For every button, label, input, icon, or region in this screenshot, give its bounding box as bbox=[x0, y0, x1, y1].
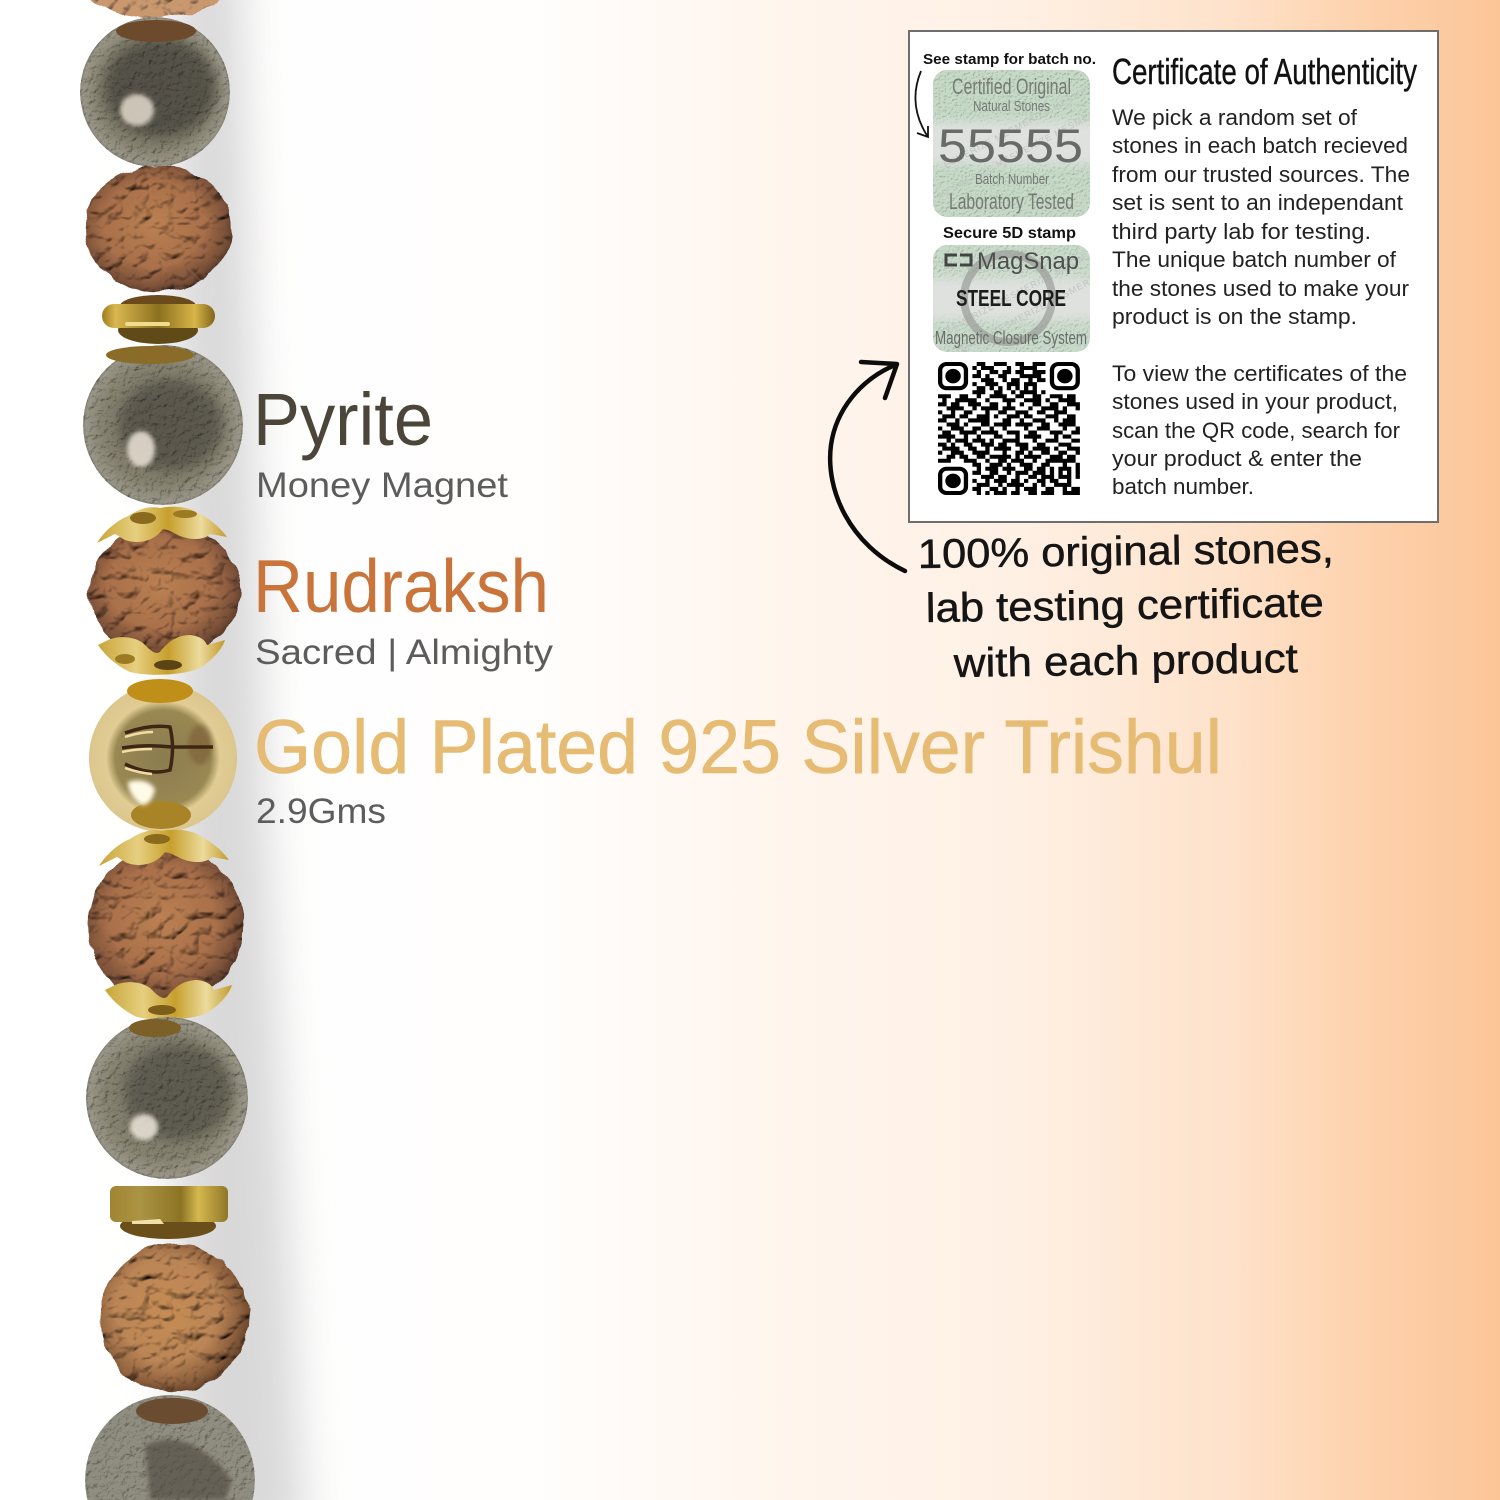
bead: rudraksh 2 with gold caps bbox=[89, 507, 241, 675]
stamp: magsnap steel core: MagSnap bbox=[977, 248, 1079, 275]
text block: how to view certificates: scan the QR code, search for bbox=[1112, 418, 1400, 443]
text block: how to view certificates: your product & enter the bbox=[1112, 446, 1362, 471]
stamp: certified original: Batch Number bbox=[975, 171, 1049, 188]
heading: Rudraksh: Rudraksh bbox=[253, 544, 549, 628]
text block: batch testing: set is sent to an independant bbox=[1112, 190, 1403, 215]
bracelet beads bbox=[80, 0, 255, 1500]
stamp: magsnap steel core: ESMERIZE MESMERIZE MESMERIZE bbox=[938, 269, 1107, 365]
soft bead shadow bbox=[175, 0, 305, 1500]
text block: batch testing: The unique batch number of bbox=[1112, 247, 1397, 272]
subheading: Money Magnet: Money Magnet bbox=[256, 466, 508, 505]
stamp: certified original bbox=[933, 70, 1090, 217]
callout: original stones: 100% original stones, bbox=[917, 525, 1334, 577]
text block: batch testing: the stones used to make your bbox=[1112, 276, 1409, 301]
bead: gold trishul bbox=[89, 679, 237, 832]
icon: trishul engraving bbox=[122, 726, 213, 774]
label: rudraksh bbox=[253, 544, 554, 672]
stamp caption: secure 5D: Secure 5D stamp bbox=[943, 225, 1076, 242]
stamp: magsnap steel core: STEEL CORE bbox=[956, 285, 1066, 311]
callout: original stones bbox=[917, 525, 1334, 686]
text block: batch testing: product is on the stamp. bbox=[1112, 304, 1357, 329]
stamp: certified original: Laboratory Tested bbox=[949, 189, 1074, 214]
label: pyrite bbox=[253, 378, 508, 505]
stamp: certified original: Natural Stones bbox=[973, 98, 1050, 115]
text block: batch testing bbox=[1112, 105, 1410, 329]
text block: batch testing: from our trusted sources. The bbox=[1112, 162, 1410, 187]
QR code bbox=[938, 362, 1080, 495]
bead: rudraksh 4 bbox=[100, 1243, 248, 1393]
text block: batch testing: stones in each batch recieved bbox=[1112, 133, 1408, 158]
bead: pyrite 3 bbox=[86, 1017, 248, 1179]
stamp: magsnap steel core: Magnetic Closure System bbox=[935, 328, 1087, 348]
gold cap: upper bbox=[97, 507, 227, 543]
bead: rudraksh 3 with gold caps bbox=[88, 830, 244, 1020]
gold cap: upper bbox=[99, 830, 229, 866]
arrow: curved arrow to card bbox=[830, 362, 905, 571]
icon: small curved arrow bbox=[915, 71, 928, 137]
callout: original stones: with each product bbox=[952, 635, 1299, 686]
stamp: magsnap steel core: MESMERIZE MESMERIZE MESMERIZE bbox=[937, 239, 1113, 339]
stamp: certified original: MESMERIZE MESMERIZE MESMERIZE bbox=[936, 100, 1112, 201]
text block: how to view certificates: batch number. bbox=[1112, 474, 1254, 499]
panel: certificate card bbox=[909, 31, 1438, 522]
bead: rudraksh 1 bbox=[84, 166, 232, 292]
bead: pyrite 4 bbox=[85, 1395, 255, 1500]
gold cap: lower bbox=[98, 635, 225, 675]
subheading: Sacred | Almighty: Sacred | Almighty bbox=[255, 633, 554, 672]
text block: batch testing: We pick a random set of bbox=[1112, 105, 1358, 130]
text block: how to view certificates: stones used in your product, bbox=[1112, 389, 1398, 414]
bead: pyrite 2 bbox=[83, 345, 243, 505]
text block: how to view certificates bbox=[1112, 361, 1407, 499]
heading: Pyrite: Pyrite bbox=[253, 378, 433, 461]
callout: original stones: lab testing certificate bbox=[925, 579, 1324, 631]
gold cap: lower bbox=[105, 980, 232, 1020]
bead: pyrite 1 bbox=[80, 17, 230, 167]
text block: how to view certificates: To view the certificates of the bbox=[1112, 361, 1407, 386]
text block: batch testing: third party lab for testing. bbox=[1112, 219, 1371, 244]
stamp caption: batch no: See stamp for batch no. bbox=[923, 52, 1096, 68]
bead: gold spacer 2 bbox=[110, 1186, 228, 1239]
stamp: certified original: 55555 bbox=[938, 119, 1083, 172]
label: trishul bbox=[254, 705, 1222, 831]
bead: gold spacer 1 bbox=[102, 295, 215, 344]
subheading: weight: 2.9Gms bbox=[256, 792, 386, 831]
bead: top rudraksh bbox=[87, 0, 223, 18]
heading: Gold Plated 925 Silver Trishul: Gold Plated 925 Silver Trishul bbox=[254, 705, 1222, 790]
stamp: certified original: Certified Original bbox=[952, 74, 1071, 99]
stamp: certified original: ESMERIZE MESMERIZE MESMERIZE bbox=[942, 74, 1111, 170]
heading: certificate of authenticity: Certificate of Authenticity bbox=[1112, 51, 1417, 92]
